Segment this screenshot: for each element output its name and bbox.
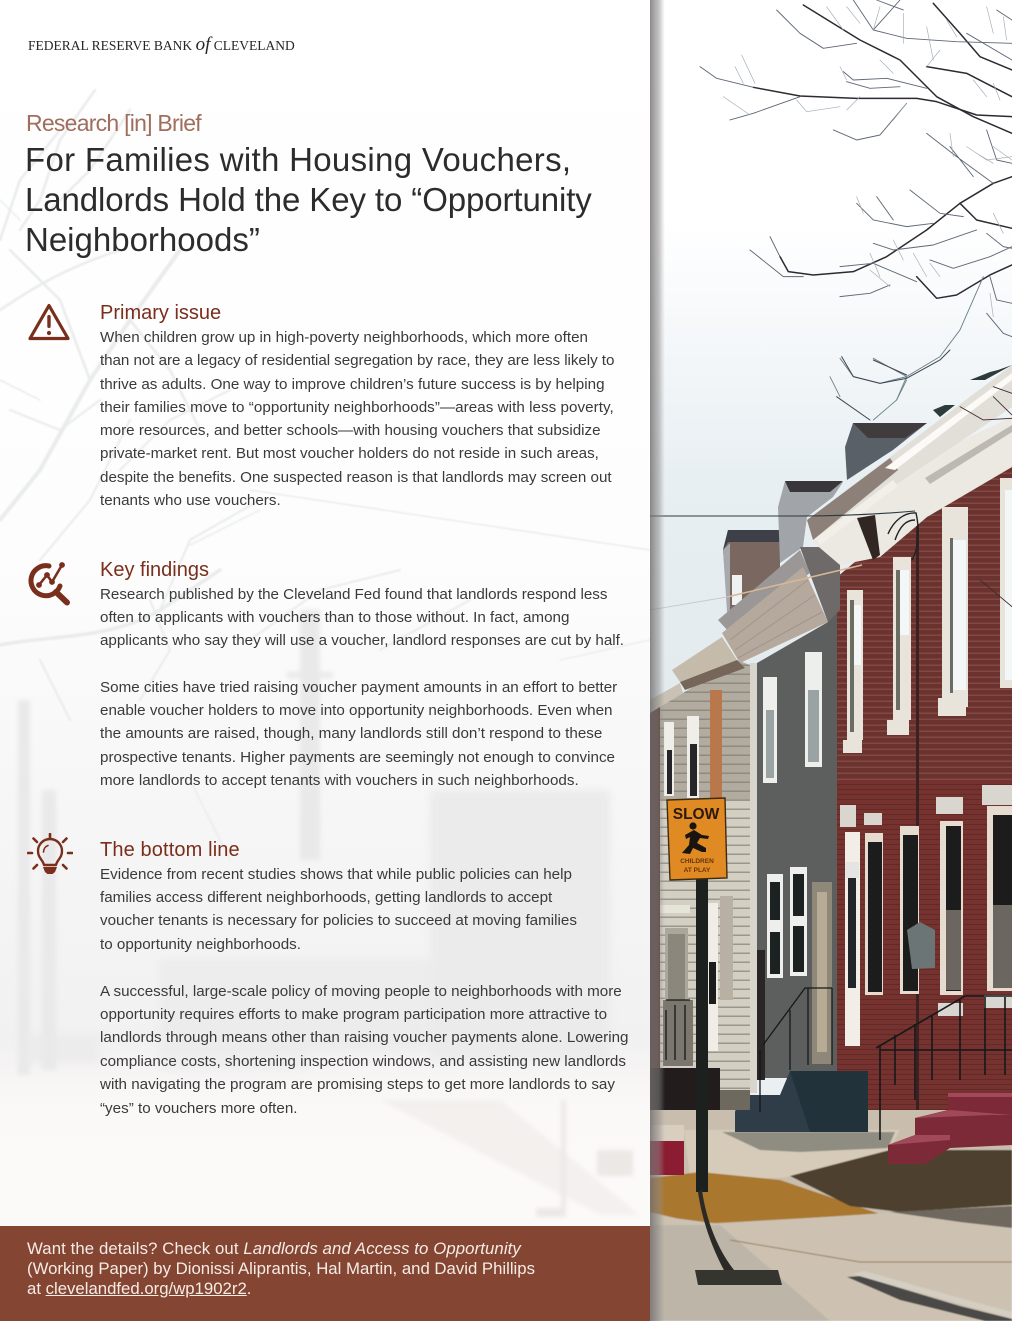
footer text <box>27 1239 535 1298</box>
roofline, dormers and awning <box>650 365 1012 713</box>
railings and pipes <box>666 988 1012 1140</box>
slow children sign <box>667 798 782 1285</box>
footer callout: working paper details <box>0 1226 650 1321</box>
text block: primary issue: than not are a legacy of residential segregation by race, they are less likely to <box>100 352 614 369</box>
text block: key findings: enable voucher holders to move into opportunity neighborhoods. Even when <box>100 702 612 719</box>
text block: primary issue: despite the benefits. One suspected reason is that landlords may screen out <box>100 469 612 486</box>
text block: primary issue: their families move to “opportunity neighborhoods”—areas with less poverty, <box>100 399 614 416</box>
faded background photo <box>0 88 650 1220</box>
icon: light bulb <box>27 833 73 874</box>
text block: the bottom line: to opportunity neighborhoods. <box>100 936 301 953</box>
text block: key findings: Some cities have tried raising voucher payment amounts in an effort to better <box>100 679 617 696</box>
text block: key findings: applicants who say they will use a voucher, landlord responses are cut by half. <box>100 632 624 649</box>
text block: primary issue: private-market rent. But most voucher holders do not reside in such areas, <box>100 445 599 462</box>
slow children sign: AT PLAY <box>684 867 711 874</box>
logo: Federal Reserve Bank of Cleveland: FEDERAL RESERVE BANK of CLEVELAND <box>28 34 295 55</box>
slow children sign: CHILDREN <box>680 858 714 865</box>
heading: the bottom line: The bottom line <box>100 839 240 861</box>
heading: key findings: Key findings <box>100 559 209 581</box>
text block: the bottom line: voucher tenants is necessary for policies to succeed at moving families <box>100 912 577 929</box>
red brick house <box>837 455 1012 1110</box>
title <box>25 141 592 258</box>
footer text: at clevelandfed.org/wp1902r2. <box>27 1279 251 1298</box>
icon: warning triangle <box>28 304 70 340</box>
sky <box>650 0 1012 1321</box>
text block: primary issue <box>100 329 614 509</box>
text block: the bottom line <box>100 866 629 1117</box>
title: Neighborhoods” <box>25 221 260 258</box>
text block: key findings: often to applicants with vouchers than to those without. In fact, among <box>100 609 569 626</box>
slow children sign: SLOW <box>673 806 720 823</box>
footer text: (Working Paper) by Dionissi Aliprantis, Hal Martin, and David Phillips <box>27 1259 535 1278</box>
title: Landlords Hold the Key to “Opportunity <box>25 181 592 218</box>
grey stucco house <box>735 547 868 1132</box>
text block: key findings: more landlords to accept tenants with vouchers in such neighborhoods. <box>100 772 579 789</box>
text block: the bottom line: Evidence from recent studies shows that while public policies can help <box>100 866 572 882</box>
bare tree branches <box>700 0 1012 400</box>
footer text: Want the details? Check out Landlords and Access to Opportunity <box>27 1239 521 1258</box>
text block: the bottom line: compliance costs, shortening inspection windows, and assisting new landlords <box>100 1053 626 1070</box>
eyebrow: Research [in] Brief: Research [in] Brief <box>26 110 201 136</box>
heading: primary issue: Primary issue <box>100 302 221 324</box>
overhead wires <box>650 511 915 610</box>
text block: the bottom line: landlords through means other than raising voucher payments alone. Lowering <box>100 1029 629 1046</box>
icon: magnifier with trend line <box>28 562 70 606</box>
text block: key findings <box>100 586 624 789</box>
red entry steps <box>888 1092 1012 1164</box>
white siding house <box>650 660 757 1175</box>
text block: primary issue: tenants who use vouchers. <box>100 492 281 509</box>
panel edge shadow <box>650 0 665 1321</box>
text block: the bottom line: A successful, large-scale policy of moving people to neighborhoods with more <box>100 983 622 1000</box>
text block: key findings: Research published by the Cleveland Fed found that landlords respond less <box>100 586 607 602</box>
text block: primary issue: When children grow up in high-poverty neighborhoods, which more often <box>100 329 588 346</box>
text block: key findings: prospective tenants. Higher payments are seemingly not enough to convince <box>100 749 615 766</box>
text block: the bottom line: with navigating the program are promising steps to get more landlords to say <box>100 1076 615 1093</box>
ground and sidewalk <box>650 1100 1012 1321</box>
title: For Families with Housing Vouchers, <box>25 141 571 178</box>
text block: the bottom line: opportunity requires efforts to make program participation more attractive to <box>100 1006 607 1023</box>
text block: the bottom line: families access different neighborhoods, getting landlords to accept <box>100 889 552 906</box>
text block: the bottom line: “yes” to vouchers more often. <box>100 1100 298 1117</box>
street photo panel <box>650 0 1012 1321</box>
text block: primary issue: more resources, and better schools—with housing vouchers that subsidize <box>100 422 601 439</box>
text block: primary issue: thrive as adults. One way to improve children’s future success is by helping <box>100 376 605 393</box>
text block: key findings: the amounts are raised, though, many landlords still don’t respond to these <box>100 725 602 742</box>
